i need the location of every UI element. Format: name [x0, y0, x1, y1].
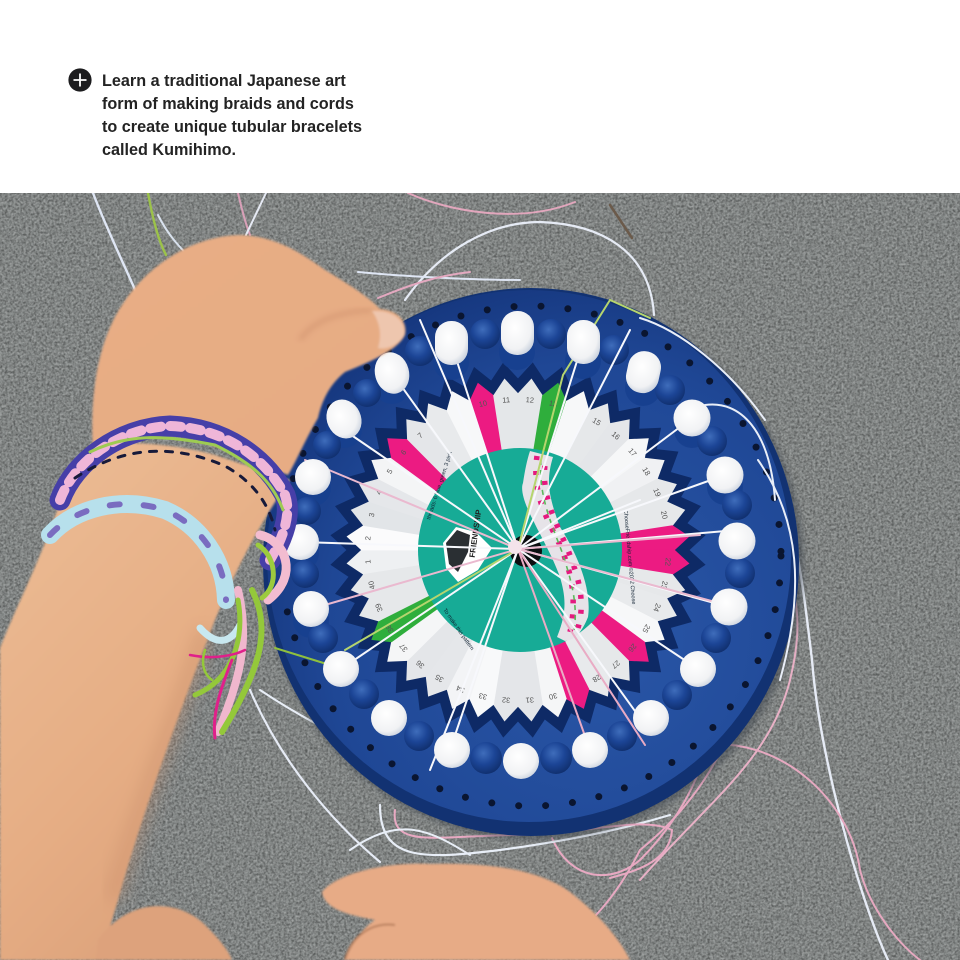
hand on the loom [92, 235, 406, 475]
white pegs [283, 311, 756, 779]
text block: intro: form of making braids and cords [102, 95, 354, 113]
icon: plus in circle [68, 68, 92, 92]
wedge numbers: 38 [384, 623, 396, 635]
dark notched ring [346, 378, 690, 722]
lower limb bump [96, 906, 232, 960]
wedge numbers: 40 [366, 580, 377, 590]
circular teal microcopy: threads: 6 blue, green, 3 pink [426, 451, 454, 521]
wedge numbers: 25 [640, 623, 652, 635]
pink and green threads [275, 300, 795, 750]
wedge numbers: 37 [397, 642, 410, 654]
bracelet tassels [190, 535, 286, 738]
circular teal microcopy: ChooseFriendship.com ©2022 Choose [622, 510, 637, 605]
disc face [267, 290, 791, 822]
wedge numbers: 20 [659, 510, 670, 520]
wedge numbers: 24 [651, 602, 663, 613]
wedge numbers: 11 [502, 395, 510, 405]
white threads converging at the centre [301, 320, 737, 770]
wedge numbers: 33 [478, 691, 488, 702]
wedge numbers: 23 [659, 580, 670, 590]
wedge numbers: 28 [591, 672, 603, 684]
disc shadow [264, 292, 804, 840]
bracelet: pale blue band [50, 504, 240, 640]
wedge numbers: 30 [548, 691, 558, 702]
paper wheel wedges [346, 378, 690, 722]
logo badge [443, 508, 492, 582]
loose threads behind the loom [93, 193, 920, 960]
wedge numbers: 1 [363, 559, 373, 564]
pad shadows under pegs [283, 334, 743, 638]
wedge numbers: 13 [548, 398, 558, 409]
wedge numbers: 31 [525, 695, 534, 705]
wedge numbers: 5 [385, 467, 395, 475]
thumbnail [372, 311, 404, 348]
teal centre circle [418, 448, 622, 652]
forearm [0, 443, 290, 960]
text block: intro: called Kumihimo. [102, 141, 236, 159]
wedge numbers: 2 [363, 536, 373, 541]
wedge numbers: 16 [610, 429, 622, 442]
circular teal microcopy [426, 451, 637, 652]
wedge numbers: 27 [610, 658, 622, 671]
lower fingers [322, 864, 630, 960]
loom disc [263, 288, 804, 840]
knot at the centre [508, 540, 522, 554]
wedge numbers: 12 [525, 395, 534, 405]
text block: intro [102, 72, 362, 159]
floral ribbon [522, 451, 589, 641]
wedge numbers: 39 [373, 602, 385, 613]
wedge numbers: 19 [651, 487, 663, 498]
wedge numbers: 6 [399, 448, 408, 457]
wedge numbers: 22 [663, 557, 673, 566]
centre hole [510, 535, 542, 567]
blue pegs [291, 319, 755, 774]
holes [281, 306, 781, 806]
text block: intro: to create unique tubular bracelets [102, 118, 362, 136]
wedge numbers: 4 [374, 489, 384, 496]
wedge numbers: 34 [455, 683, 466, 695]
wedge numbers [363, 395, 673, 705]
text block: intro: Learn a traditional Japanese art [102, 72, 346, 90]
circular teal microcopy: To make this pattern [441, 608, 475, 652]
photo scene [0, 193, 960, 960]
wedge numbers: 17 [626, 446, 639, 458]
knuckle crease [300, 310, 372, 340]
wedge numbers: 10 [478, 398, 488, 409]
wedge numbers: 15 [591, 416, 603, 428]
wedge numbers: 7 [416, 431, 425, 440]
wedge numbers: 18 [640, 465, 652, 477]
wedge numbers: 3 [367, 512, 377, 518]
wedge numbers: 32 [502, 695, 511, 705]
wedge numbers: 26 [626, 642, 639, 654]
logo badge: FRIENDSHIP [468, 508, 483, 558]
arm edge shading [112, 630, 205, 900]
bracelet: purple braid [60, 426, 287, 560]
disc rim [263, 288, 799, 836]
concrete ground [0, 193, 960, 960]
wedge numbers: 36 [414, 658, 426, 671]
wedge numbers: 35 [433, 672, 445, 684]
